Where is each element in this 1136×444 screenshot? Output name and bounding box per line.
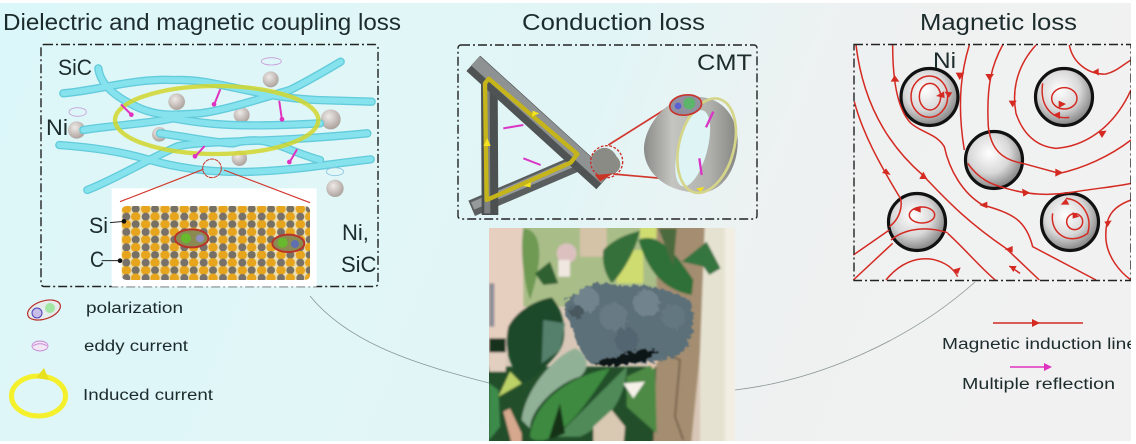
- legend: magnetic lines: [942, 319, 1136, 393]
- lattice inset: [102, 169, 317, 287]
- label: Ni, SiC: Ni,: [342, 220, 369, 245]
- label: SiC: SiC: [58, 55, 92, 80]
- heading: conduction loss: Conduction loss: [522, 9, 705, 35]
- label: CMT: CMT: [697, 50, 752, 75]
- panel: conduction loss: [458, 45, 757, 219]
- CMT tube triangle and ring: [472, 61, 746, 215]
- magnetic field lines: [853, 45, 1131, 281]
- text: induced current: Induced current: [83, 387, 214, 404]
- heading: dielectric and magnetic coupling loss: Dielectric and magnetic coupling loss: [3, 9, 401, 35]
- panel: magnetic loss: [853, 44, 1131, 281]
- right margin: [1131, 0, 1136, 444]
- legend: loss mechanisms: [12, 296, 214, 416]
- text: polarization: polarization: [86, 300, 183, 317]
- icon: polarization: [25, 296, 63, 324]
- text: magnetic induction line: Magnetic induction line: [942, 336, 1136, 353]
- icon: red line arrow: [993, 319, 1083, 327]
- label: C: C: [90, 247, 104, 272]
- icon: eddy current: [32, 341, 48, 351]
- panel: dielectric and magnetic coupling: [41, 44, 378, 287]
- photo: absorber sponge on leaf: [489, 228, 735, 441]
- connector line: right panel to photo: [735, 282, 975, 390]
- text: eddy current: eddy current: [84, 338, 189, 355]
- field line arrowheads: [882, 68, 1112, 274]
- label: Ni: Ni: [46, 115, 68, 140]
- text: multiple reflection: Multiple reflection: [962, 376, 1115, 393]
- label: Ni: Ni: [933, 48, 956, 73]
- heading: magnetic loss: Magnetic loss: [920, 9, 1077, 35]
- label: Ni, SiC: SiC: [341, 252, 377, 277]
- icon: magenta arrow: [1010, 363, 1052, 371]
- label: Si: Si: [89, 213, 108, 238]
- dashed frame: [854, 44, 1131, 280]
- SiC fibers with Ni particles: [59, 58, 372, 197]
- icon: induced current: [12, 368, 66, 416]
- Ni spheres: [888, 68, 1098, 250]
- connector line: left panel to photo: [310, 296, 489, 383]
- foam sponge: [564, 284, 693, 366]
